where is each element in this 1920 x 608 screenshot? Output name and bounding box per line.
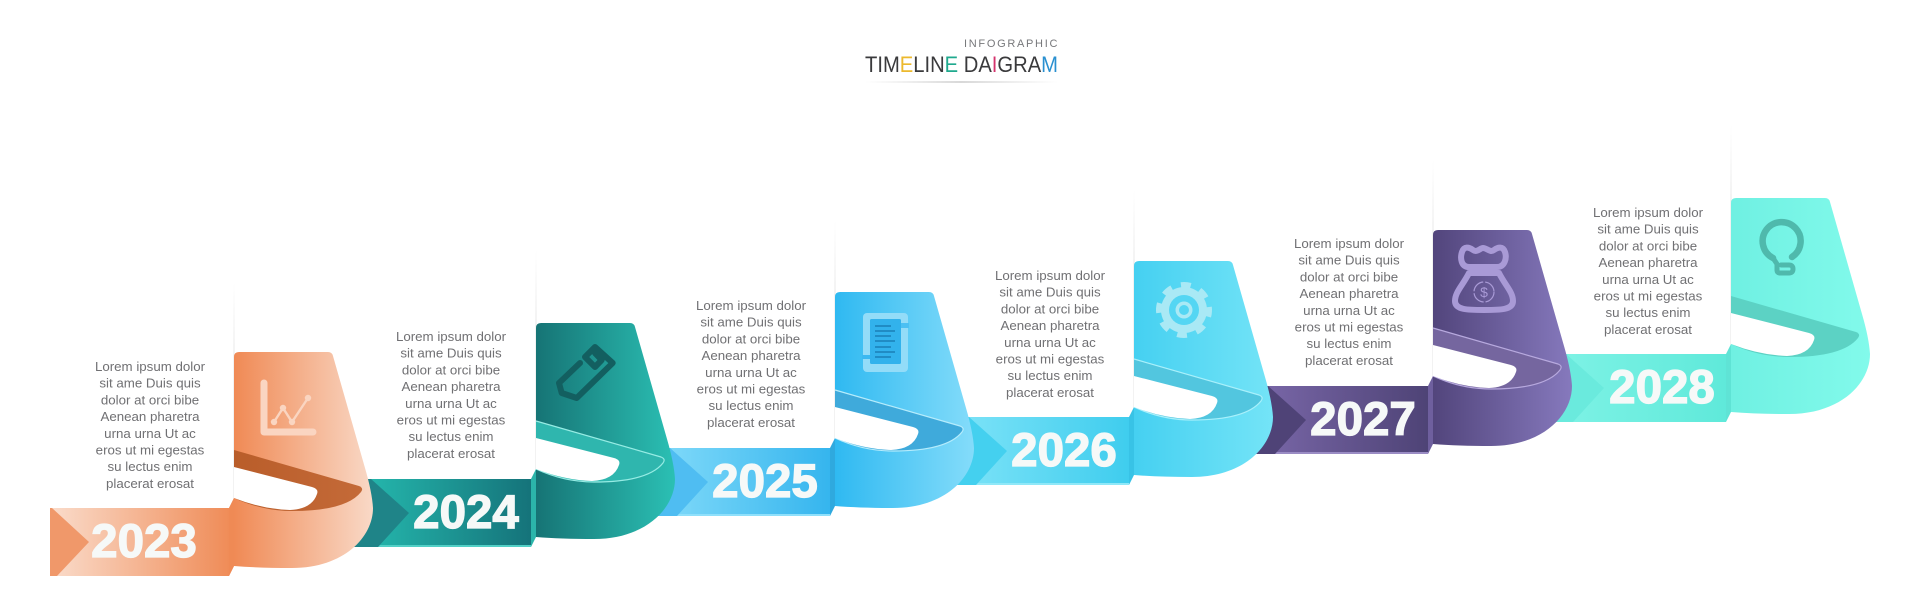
- fold panel: 2027: [1433, 230, 1572, 446]
- text block: 2028: [1593, 205, 1704, 337]
- text block: 2024: Aenean pharetra: [401, 379, 501, 394]
- ribbon: 2025: 2025: [712, 455, 818, 508]
- text block: 2028: Aenean pharetra: [1598, 255, 1698, 270]
- eyebrow: infographic: INFOGRAPHIC: [964, 38, 1060, 50]
- ribbon: 2024: 2024: [413, 486, 519, 539]
- text block: 2025: eros ut mi egestas: [697, 382, 806, 396]
- ribbon: 2026: [950, 407, 1134, 485]
- ribbon: 2028: 2028: [1609, 361, 1715, 414]
- text block: 2027: Aenean pharetra: [1299, 286, 1399, 301]
- text block: 2023: Lorem ipsum dolor: [95, 359, 206, 374]
- text block: 2026: Aenean pharetra: [1000, 318, 1100, 333]
- text block: 2028: sit ame Duis quis: [1597, 222, 1699, 237]
- text block: 2025: dolor at orci bibe: [702, 331, 800, 346]
- ribbon: 2028: [1547, 344, 1731, 422]
- text block: 2024: [396, 329, 507, 461]
- text block: 2028: eros ut mi egestas: [1594, 288, 1703, 304]
- fold panel: 2024: [536, 323, 675, 539]
- text block: 2026: Lorem ipsum dolor: [995, 268, 1106, 283]
- text block: 2027: urna urna Ut ac: [1303, 303, 1395, 318]
- text block: 2023: [95, 359, 206, 491]
- ribbon: 2024: [352, 469, 536, 547]
- icon: light bulb: [1763, 222, 1801, 273]
- heading: timeline diagram: TIMELINE DAIGRAM: [865, 52, 1058, 77]
- text block: 2027: sit ame Duis quis: [1298, 253, 1400, 268]
- text block: 2026: eros ut mi egestas: [996, 352, 1105, 366]
- text block: 2024: sit ame Duis quis: [400, 346, 502, 361]
- text block: 2024: eros ut mi egestas: [397, 412, 506, 428]
- text block: 2027: placerat erosat: [1305, 353, 1393, 368]
- text block: 2024: su lectus enim: [408, 429, 494, 444]
- text block: 2025: Lorem ipsum dolor: [696, 298, 807, 313]
- text block: 2026: dolor at orci bibe: [1001, 301, 1099, 316]
- text block: 2023: urna urna Ut ac: [104, 426, 196, 441]
- text block: 2025: placerat erosat: [707, 415, 795, 430]
- ribbon: 2027: 2027: [1310, 393, 1416, 446]
- text block: 2026: [995, 268, 1106, 400]
- fold panel: 2023: [234, 352, 373, 568]
- icon: money bag: [1455, 248, 1513, 310]
- fold panel: 2028: [1731, 198, 1870, 414]
- text block: 2026: urna urna Ut ac: [1004, 335, 1096, 350]
- text block: 2024: placerat erosat: [407, 446, 495, 461]
- text block: 2023: sit ame Duis quis: [99, 376, 201, 391]
- text block: 2027: dolor at orci bibe: [1300, 269, 1398, 284]
- icon: pencil: [559, 347, 613, 398]
- ribbon: 2026: 2026: [1011, 424, 1117, 477]
- text block: 2023: su lectus enim: [108, 459, 192, 474]
- ribbon: 2023: 2023: [91, 515, 197, 568]
- fold panel: 2026: [1134, 261, 1273, 477]
- icon: money bag: $: [1480, 284, 1488, 300]
- text block: 2028: su lectus enim: [1606, 305, 1690, 320]
- icon: gear: [1157, 283, 1211, 337]
- text block: 2023: dolor at orci bibe: [101, 392, 199, 407]
- text block: 2026: su lectus enim: [1008, 368, 1092, 383]
- text block: 2026: sit ame Duis quis: [999, 285, 1101, 300]
- icon: document: [862, 313, 909, 372]
- text block: 2028: dolor at orci bibe: [1599, 238, 1697, 253]
- text block: 2024: Lorem ipsum dolor: [396, 329, 507, 344]
- text block: 2027: [1294, 236, 1405, 368]
- text block: 2026: placerat erosat: [1006, 385, 1094, 400]
- text block: 2027: su lectus enim: [1306, 336, 1392, 351]
- ribbon: 2027: [1249, 376, 1433, 454]
- text block: 2023: Aenean pharetra: [100, 409, 200, 424]
- text block: 2023: eros ut mi egestas: [96, 442, 205, 458]
- text block: 2028: Lorem ipsum dolor: [1593, 205, 1704, 220]
- text block: 2028: urna urna Ut ac: [1602, 272, 1694, 287]
- text block: 2025: Aenean pharetra: [701, 348, 801, 363]
- text block: 2023: placerat erosat: [106, 476, 194, 491]
- text block: 2027: Lorem ipsum dolor: [1294, 236, 1405, 251]
- text block: 2025: su lectus enim: [708, 398, 794, 413]
- fold panel: 2025: [835, 292, 974, 508]
- text block: 2024: urna urna Ut ac: [405, 396, 497, 411]
- text block: 2024: dolor at orci bibe: [402, 362, 500, 377]
- text block: 2025: [696, 298, 807, 430]
- ribbon: 2025: [651, 438, 835, 516]
- text block: 2025: urna urna Ut ac: [705, 365, 797, 380]
- text block: 2028: placerat erosat: [1604, 322, 1692, 337]
- icon: line chart: [264, 383, 313, 432]
- text block: 2025: sit ame Duis quis: [700, 315, 802, 330]
- ribbon: 2023: [50, 498, 234, 576]
- text block: 2027: eros ut mi egestas: [1295, 320, 1404, 334]
- title: [865, 38, 1060, 83]
